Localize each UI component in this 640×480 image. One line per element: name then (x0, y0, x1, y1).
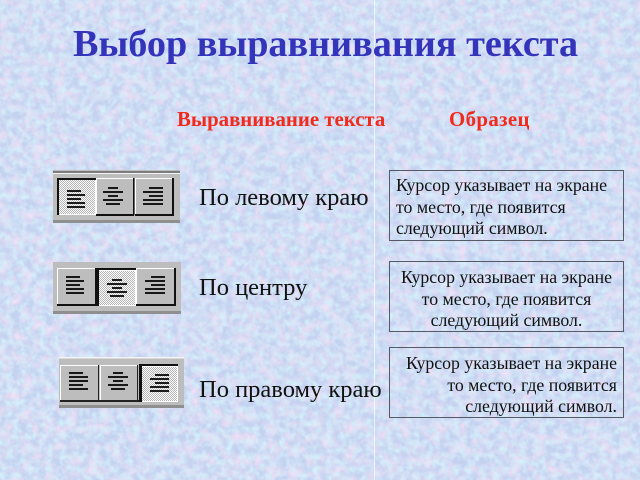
label: left edge: По левому краю (199, 184, 369, 211)
button: left align (57, 268, 96, 306)
button: center align (99, 365, 139, 402)
column heading: sample: Образец (449, 108, 530, 131)
toolbar: center alignment selected (53, 262, 181, 314)
button: center align (96, 178, 134, 216)
column heading: text alignment: Выравнивание текста (177, 108, 385, 131)
button: right align pressed (139, 364, 178, 402)
button: right align (135, 178, 174, 216)
sample box: center aligned: то место, где появится (422, 288, 591, 308)
label: center: По центру (199, 274, 307, 301)
sample box: center aligned: следующий символ. (431, 310, 582, 330)
sample box: center aligned (389, 261, 624, 332)
button: right align (136, 268, 176, 306)
button: left align (60, 365, 99, 402)
sample box: right aligned (389, 347, 624, 418)
button: center align pressed (96, 268, 136, 306)
sample box: left aligned: то место, где появится (396, 196, 566, 216)
toolbar: right alignment selected (59, 357, 184, 408)
sample box: left aligned (389, 170, 624, 241)
sample box: right aligned: то место, где появится (447, 374, 617, 394)
title: Выбор выравнивания текста (73, 23, 578, 65)
sample box: left aligned: Курсор указывает на экране (396, 175, 607, 195)
sample box: right aligned: Курсор указывает на экране (406, 353, 617, 373)
toolbar: left alignment selected (53, 170, 180, 223)
button: left align pressed (57, 178, 96, 215)
sample box: right aligned: следующий символ. (465, 396, 617, 416)
sample box: center aligned: Курсор указывает на экране (401, 267, 612, 287)
sample box: left aligned: следующий символ. (396, 218, 548, 238)
label: right edge: По правому краю (199, 376, 382, 403)
